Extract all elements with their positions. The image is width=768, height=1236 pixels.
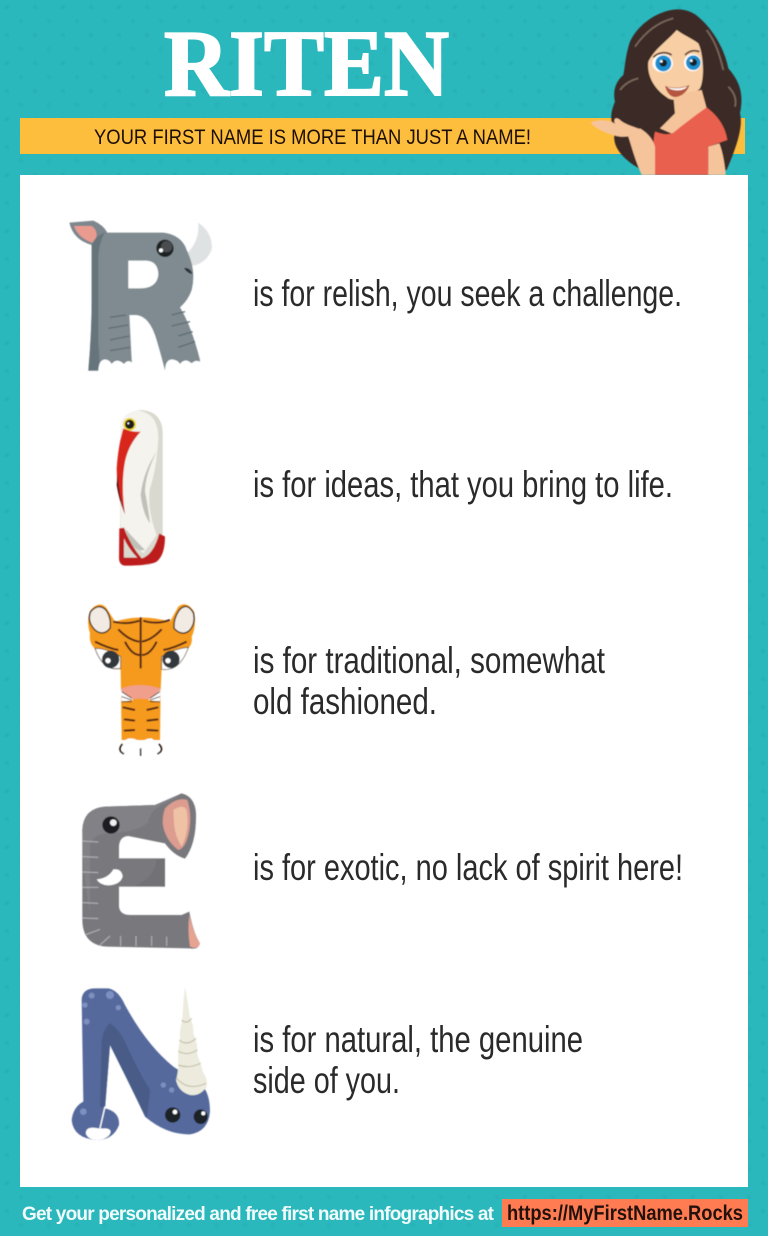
letter N narwhal xyxy=(72,987,210,1140)
footer call to action: Get your personalized and free first name infographics at xyxy=(22,1204,495,1225)
illustration: woman presenting xyxy=(591,9,741,175)
letter T tiger xyxy=(88,604,195,756)
text: N line: is for natural, the genuine xyxy=(253,1019,583,1060)
text: T line xyxy=(253,640,606,722)
text: N line xyxy=(253,1019,583,1101)
letter E elephant xyxy=(82,793,200,949)
main white panel xyxy=(20,175,748,1187)
subtitle banner: YOUR FIRST NAME IS MORE THAN JUST A NAME! xyxy=(94,126,531,149)
text: N line: side of you. xyxy=(253,1060,400,1101)
text: T line: is for traditional, somewhat xyxy=(253,640,606,681)
text: T line: old fashioned. xyxy=(253,681,437,722)
letter R rhino xyxy=(69,221,212,372)
subtitle banner xyxy=(20,118,745,154)
title: RITEN xyxy=(164,12,449,116)
letter I stork xyxy=(117,410,165,566)
